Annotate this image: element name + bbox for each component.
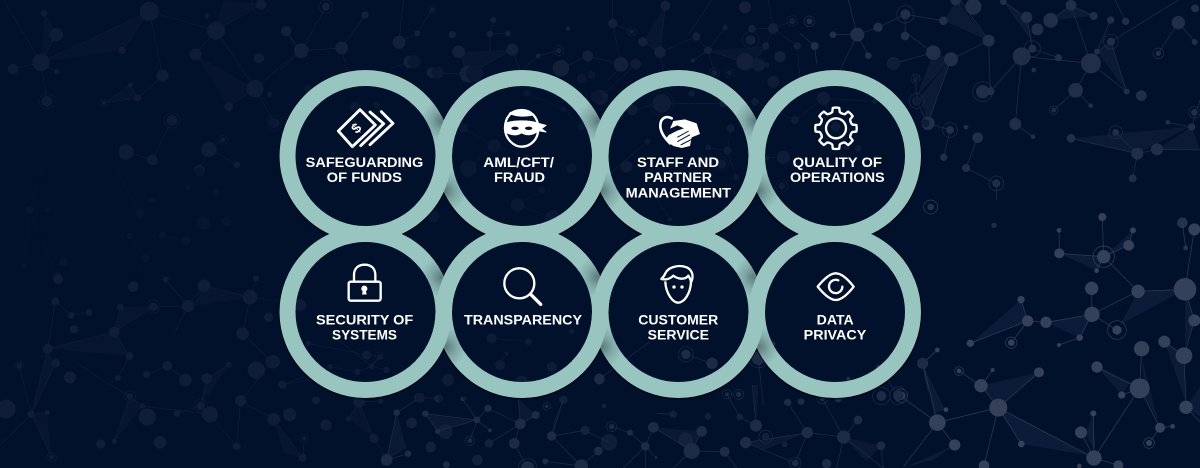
- ring outer dark edges: [280, 71, 921, 399]
- label: MANAGEMENT: [626, 186, 732, 201]
- background network: left top: [3, 0, 298, 176]
- background network: top right: [800, 0, 1200, 200]
- background network: left bottom: [0, 274, 400, 466]
- label: SERVICE: [648, 327, 709, 342]
- label: [483, 155, 554, 185]
- icon: banknotes: [338, 110, 393, 147]
- icon: customer face: [661, 266, 693, 303]
- icon: gear: [815, 108, 857, 149]
- card: customer service: [600, 234, 756, 390]
- card: safeguarding of funds: [288, 78, 444, 234]
- label: [626, 155, 732, 201]
- icon: handshake: [660, 117, 700, 148]
- label: OF FUNDS: [327, 170, 402, 185]
- background network: inside first rings: [269, 55, 603, 227]
- label: SYSTEMS: [332, 327, 397, 342]
- icon: magnifying glass: [504, 268, 541, 304]
- background network: top middle: [280, 0, 801, 83]
- background network: bottom middle: [381, 385, 890, 468]
- background network: left middle: [0, 167, 232, 282]
- label: STAFF AND: [637, 155, 719, 170]
- card: data privacy: [757, 234, 913, 390]
- background network: inside lower-right rings: [594, 342, 928, 405]
- label: SECURITY OF: [316, 312, 413, 327]
- background network: right bright cluster: [894, 200, 1200, 468]
- label: [804, 312, 866, 342]
- icon: masked bandit: [505, 110, 546, 147]
- icon: banknotes: $: [348, 120, 365, 137]
- label: DATA: [817, 312, 854, 327]
- label: SAFEGUARDING: [306, 155, 423, 170]
- label: OPERATIONS: [790, 170, 885, 185]
- label: PRIVACY: [804, 327, 866, 342]
- label: FRAUD: [494, 170, 545, 185]
- label: TRANSPARENCY: [464, 312, 582, 327]
- background network: inside upper rings: [594, 58, 930, 221]
- icon: padlock: [349, 265, 381, 301]
- ring junction shadows: [288, 78, 913, 390]
- card: AML/CFT/fraud: [444, 78, 600, 234]
- card: quality of operations: [757, 78, 913, 234]
- label: [790, 155, 885, 185]
- label: QUALITY OF: [793, 155, 882, 170]
- card: security of systems: [288, 234, 444, 390]
- label: PARTNER: [644, 170, 712, 185]
- label: CUSTOMER: [638, 312, 719, 327]
- label: [306, 155, 423, 185]
- label: [638, 312, 719, 342]
- label: [316, 312, 413, 342]
- label: AML/CFT/: [483, 155, 554, 170]
- card: transparency: [444, 234, 600, 390]
- card: staff and partner management: [600, 78, 756, 234]
- background network: inside lower-left rings: [267, 299, 574, 403]
- icon: eye: [818, 273, 854, 300]
